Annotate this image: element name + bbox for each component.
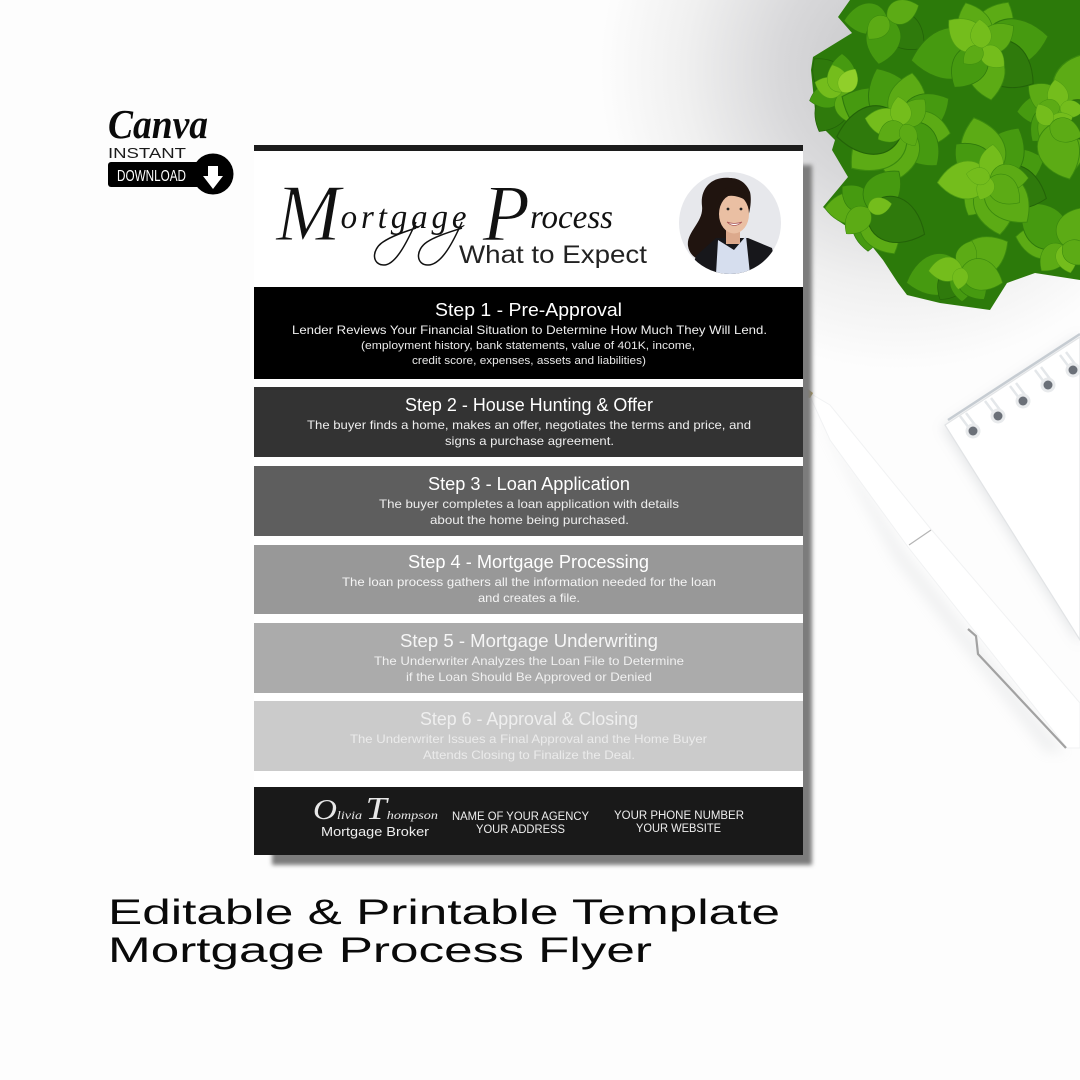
footer contact bar <box>254 787 803 855</box>
step 1 panel: Step 1 - Pre-Approval <box>435 300 622 320</box>
flyer shadow <box>272 165 812 865</box>
step 2 panel <box>254 387 803 457</box>
rosette centre left <box>832 59 958 187</box>
step 6 panel: The Underwriter Issues a Final Approval and the Home Buyer <box>350 732 707 746</box>
step 4 panel: The loan process gathers all the information needed for the loan <box>342 575 716 589</box>
rosette top centre <box>907 0 1052 103</box>
step 5 panel: The Underwriter Analyzes the Loan File to Determine <box>374 654 684 668</box>
step 6 panel: Attends Closing to Finalize the Deal. <box>423 748 635 762</box>
rosette left <box>802 49 865 140</box>
step 1 panel: (employment history, bank statements, value of 401K, income, <box>361 340 695 352</box>
rosette lower left <box>825 160 934 263</box>
portrait photo <box>679 172 781 274</box>
broker signature: O livia T hompson <box>313 790 438 826</box>
succulent plant <box>802 0 1080 310</box>
script title: M <box>275 170 345 258</box>
subtitle: What to Expect <box>459 241 647 269</box>
pen <box>804 386 1080 752</box>
agency details <box>452 811 589 836</box>
download pill: DOWNLOAD <box>117 168 186 185</box>
script title: ortgage <box>341 199 483 236</box>
script title: rocess <box>530 199 613 236</box>
step 6 panel <box>254 701 803 771</box>
agency details: YOUR ADDRESS <box>476 824 565 836</box>
phone and website: YOUR PHONE NUMBER <box>614 810 744 822</box>
step 4 panel <box>254 545 803 614</box>
rosette right middle <box>1031 100 1080 186</box>
broker role: Mortgage Broker <box>321 824 430 839</box>
step 1 panel: credit score, expenses, assets and liabilities) <box>412 355 646 367</box>
step 3 panel: about the home being purchased. <box>430 513 629 527</box>
phone and website: YOUR WEBSITE <box>636 823 721 835</box>
step 5 panel: Step 5 - Mortgage Underwriting <box>400 631 658 651</box>
agency details: NAME OF YOUR AGENCY <box>452 811 589 823</box>
rosette top <box>843 0 935 67</box>
step 5 panel <box>254 623 803 693</box>
step 5 panel: if the Loan Should Be Approved or Denied <box>406 670 652 684</box>
rosette centre <box>936 112 1054 238</box>
step 3 panel: The buyer completes a loan application with details <box>379 497 679 511</box>
rosette lower right <box>1008 190 1080 279</box>
script title <box>275 170 613 265</box>
notebook rings <box>960 352 1080 438</box>
script title: P <box>482 170 530 258</box>
flyer header <box>275 170 781 274</box>
step 2 panel: Step 2 - House Hunting & Offer <box>405 395 653 415</box>
step 2 panel: The buyer finds a home, makes an offer, negotiates the terms and price, and <box>307 418 751 432</box>
bottom caption: Mortgage Process Flyer <box>108 931 652 970</box>
pen clip <box>968 629 1066 748</box>
step 3 panel <box>254 466 803 536</box>
Canva instant download badge <box>108 101 234 194</box>
notebook <box>942 334 1080 645</box>
bottom caption: Editable & Printable Template <box>108 893 780 932</box>
step 2 panel: signs a purchase agreement. <box>445 434 614 448</box>
step 1 panel: Lender Reviews Your Financial Situation to Determine How Much They Will Lend. <box>292 323 767 337</box>
icon: download arrow <box>203 166 223 189</box>
flyer <box>254 145 803 855</box>
bottom caption <box>108 893 780 970</box>
rosette bottom <box>901 225 1017 307</box>
instant label: INSTANT <box>108 145 186 162</box>
step 4 panel: Step 4 - Mortgage Processing <box>408 552 649 572</box>
step 4 panel: and creates a file. <box>478 591 580 605</box>
Canva logotype: Canva <box>108 101 208 147</box>
phone and website <box>614 810 744 835</box>
step 1 panel <box>254 287 803 379</box>
step 3 panel: Step 3 - Loan Application <box>428 474 630 494</box>
rosette far right upper <box>1016 36 1080 174</box>
step 6 panel: Step 6 - Approval & Closing <box>420 709 638 729</box>
